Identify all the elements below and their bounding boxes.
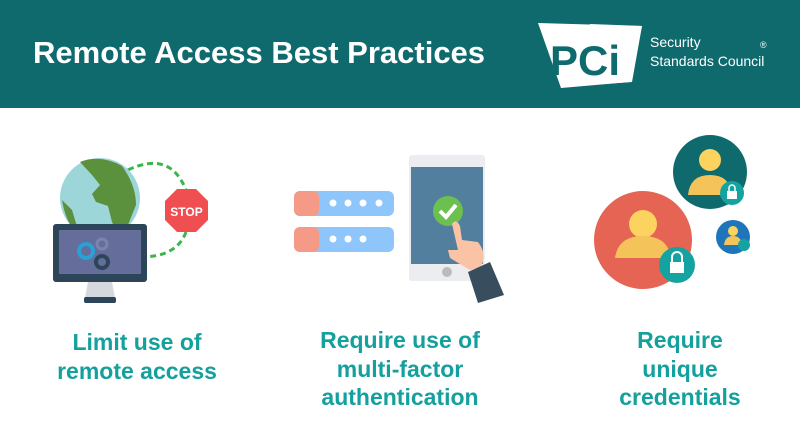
- icon: globe monitor stop: [53, 158, 208, 303]
- label: limit use: Limit use of: [72, 329, 202, 355]
- logo: PCI: Standards Council: [650, 53, 764, 69]
- icon: globe monitor stop: STOP: [170, 205, 203, 219]
- label: limit use: [57, 329, 217, 384]
- label: unique credentials: unique: [642, 356, 718, 382]
- logo: PCI: ®: [760, 40, 767, 50]
- label: limit use: remote access: [57, 358, 217, 384]
- label: MFA: Require use of: [320, 327, 480, 353]
- header band: [0, 0, 800, 108]
- title: Remote Access Best Practices: [33, 35, 485, 70]
- label: MFA: multi-factor: [337, 356, 463, 382]
- logo: PCI: PCi: [550, 37, 620, 84]
- logo: PCI: Security: [650, 34, 701, 50]
- icon: user avatars: [594, 135, 750, 289]
- icon: login bars and phone: [294, 155, 504, 303]
- label: MFA: [320, 327, 480, 410]
- label: MFA: authentication: [321, 384, 479, 410]
- label: unique credentials: [619, 327, 741, 410]
- logo: PCI: [538, 23, 767, 88]
- label: unique credentials: credentials: [619, 384, 741, 410]
- label: unique credentials: Require: [637, 327, 723, 353]
